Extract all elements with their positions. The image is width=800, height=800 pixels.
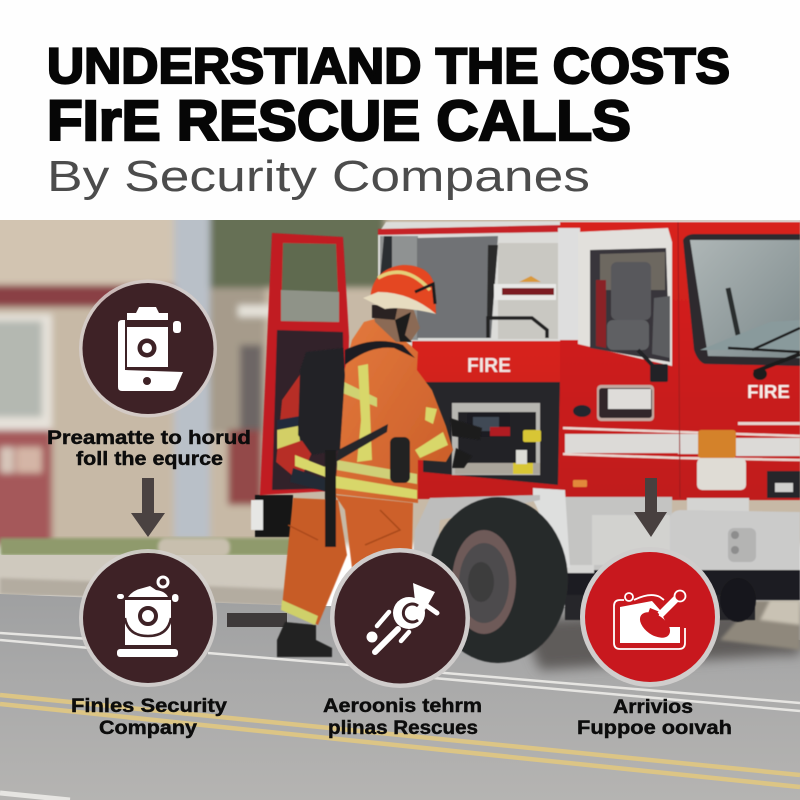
FIRE lettering on side: FIRE — [467, 355, 511, 377]
label: step 3 — [323, 695, 482, 739]
truck cab upper section — [378, 220, 800, 350]
label: step 2 — [71, 695, 227, 739]
equipment compartment — [423, 382, 560, 485]
connector arrow bar — [227, 613, 287, 627]
label: step 2: Finles Security — [71, 695, 227, 717]
step 4 group: arrow, icon, label — [577, 478, 732, 739]
icon circle: arrival equipment — [580, 547, 720, 687]
title: FIrE RESCUE CALLS — [47, 89, 631, 153]
label: step 3: Aeroonis tehrm — [323, 695, 482, 717]
label: step 1: Preamatte to horud — [47, 427, 251, 449]
label: step 3: plinas Rescues — [328, 717, 478, 739]
label: step 4 — [577, 696, 732, 739]
far arm sleeve — [275, 374, 312, 476]
blurred building background — [0, 200, 800, 545]
fire truck — [378, 220, 800, 663]
photo scene: street with fire truck — [0, 200, 800, 800]
icon circle: rescue equipment — [330, 548, 470, 688]
arrow: down to step 4 — [634, 478, 667, 537]
open truck door — [251, 233, 349, 537]
FIRE lettering on front: FIRE — [747, 382, 790, 402]
firefighter — [276, 265, 482, 657]
header background — [0, 0, 800, 220]
helmet — [363, 265, 436, 314]
title — [47, 38, 730, 153]
title: UNDERSTIAND THE COSTS — [47, 38, 730, 94]
label: step 1: foll the equrce — [76, 448, 223, 470]
trousers — [281, 495, 413, 625]
icon circle: security device — [79, 549, 217, 687]
head — [372, 305, 420, 342]
subtitle: By Security Companes — [47, 152, 590, 201]
breathing apparatus backpack — [298, 341, 415, 547]
icon circle: phone device — [79, 280, 217, 418]
wheel — [428, 497, 568, 663]
step 1 group: icon, label, arrow — [47, 280, 251, 537]
label: step 1 — [47, 427, 251, 470]
step 2 group: icon, label — [71, 549, 227, 739]
label: step 4: Fuppoe ooıvah — [577, 717, 732, 739]
arrow: down to step 2 — [131, 478, 165, 537]
boots — [277, 622, 332, 657]
jacket — [335, 318, 453, 503]
step 3 group: icon, label — [323, 548, 482, 739]
reflective stripes — [290, 364, 448, 499]
label: step 4: Arrivios — [613, 696, 693, 718]
gloves — [450, 418, 482, 468]
truck red body — [412, 222, 800, 500]
label: step 2: Company — [99, 717, 197, 739]
truck lower section and bumper — [412, 488, 800, 622]
ground: grass, sidewalk, road — [0, 538, 800, 800]
